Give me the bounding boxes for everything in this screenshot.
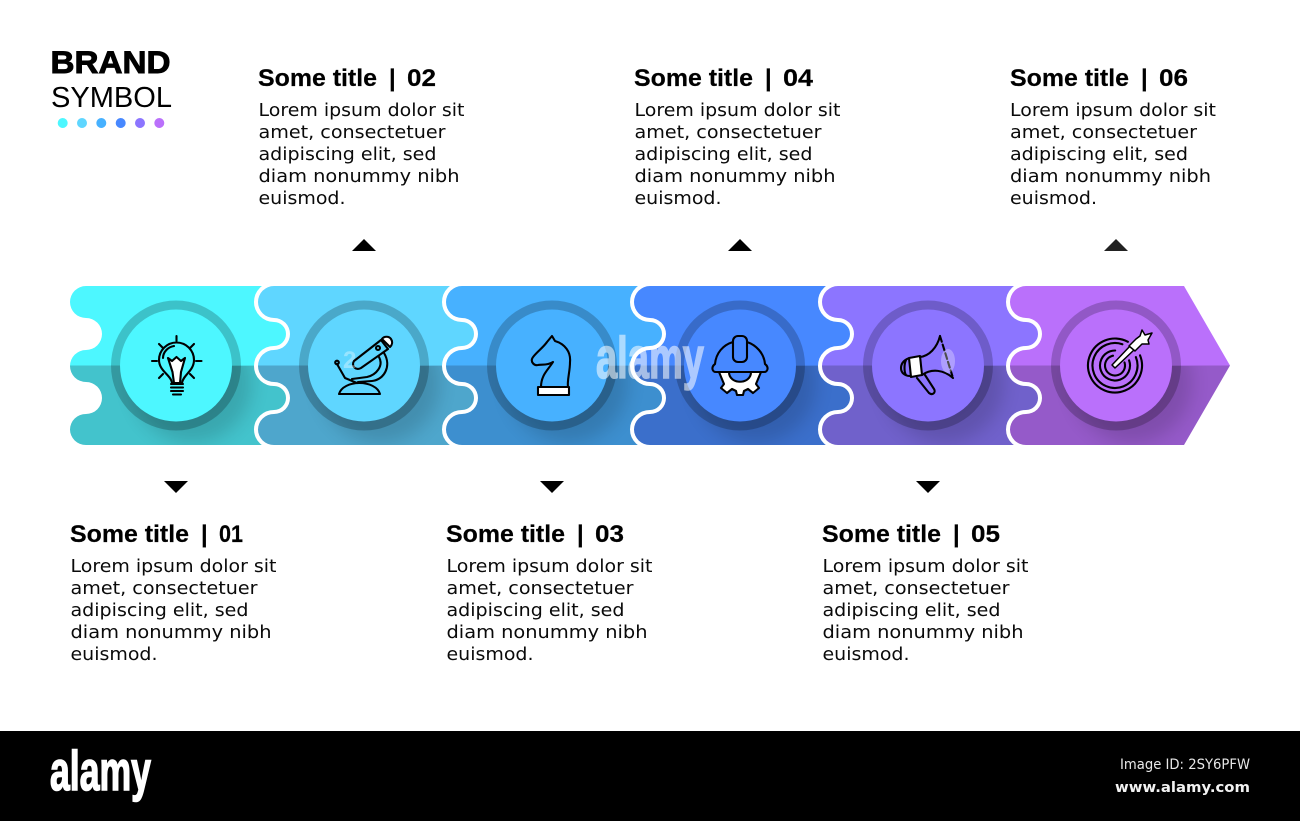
text block 03: diam nonummy nibh bbox=[446, 622, 648, 643]
text block 03: Some title bbox=[446, 521, 565, 548]
text block 04: Lorem ipsum dolor sit bbox=[634, 100, 840, 121]
text block 04: | bbox=[765, 65, 772, 92]
text block 01: diam nonummy nibh bbox=[70, 622, 272, 643]
text block 06: Some title bbox=[1010, 65, 1129, 92]
text block 03: 03 bbox=[595, 521, 624, 548]
text block 05: euismod. bbox=[822, 644, 910, 665]
text block 06 bbox=[1010, 65, 1216, 209]
icon: microscope bbox=[335, 337, 392, 394]
text block 04 bbox=[634, 65, 840, 209]
text block 05: amet, consectetuer bbox=[822, 578, 1010, 599]
text block 02: euismod. bbox=[258, 188, 346, 209]
segment 4 bbox=[634, 286, 859, 445]
text block 06: diam nonummy nibh bbox=[1010, 166, 1211, 187]
segment 6 arrow head bbox=[1010, 286, 1230, 445]
text block 05: Some title bbox=[822, 521, 941, 548]
icon: helmet with gear bbox=[712, 336, 768, 395]
text block 01: Lorem ipsum dolor sit bbox=[70, 556, 276, 577]
text block 03: euismod. bbox=[446, 644, 534, 665]
text block 02: amet, consectetuer bbox=[258, 122, 446, 143]
text block 03: amet, consectetuer bbox=[446, 578, 634, 599]
text block 06: Lorem ipsum dolor sit bbox=[1010, 100, 1216, 121]
text block 01: 01 bbox=[219, 521, 243, 548]
text block 01 bbox=[70, 521, 276, 665]
text block 06: adipiscing elit, sed bbox=[1010, 144, 1188, 165]
text block 06: amet, consectetuer bbox=[1010, 122, 1198, 143]
text block 01: Some title bbox=[70, 521, 189, 548]
brand logo: SYMBOL bbox=[51, 82, 172, 114]
arrow down 03 bbox=[540, 481, 564, 493]
puzzle arrow band bbox=[70, 286, 1230, 445]
text block 05: Lorem ipsum dolor sit bbox=[822, 556, 1028, 577]
text block 06: | bbox=[1141, 65, 1148, 92]
text block 01: euismod. bbox=[70, 644, 158, 665]
segment 5 bbox=[822, 286, 1047, 445]
footer logo: alamy bbox=[50, 739, 151, 802]
arrow down 05 bbox=[916, 481, 940, 493]
footer bar bbox=[0, 731, 1300, 821]
text block 03: adipiscing elit, sed bbox=[446, 600, 624, 621]
text block 03 bbox=[446, 521, 652, 665]
text block 01: | bbox=[201, 521, 208, 548]
icon: light bulb bbox=[152, 336, 202, 394]
text block 04: 04 bbox=[783, 65, 814, 92]
text block 01: adipiscing elit, sed bbox=[70, 600, 248, 621]
text block 02: 02 bbox=[407, 65, 436, 92]
arrow up 02 bbox=[352, 239, 376, 251]
text block 03: Lorem ipsum dolor sit bbox=[446, 556, 652, 577]
text block 02 bbox=[258, 65, 464, 209]
text block 05: diam nonummy nibh bbox=[822, 622, 1024, 643]
text block 05: | bbox=[953, 521, 960, 548]
text block 02: Lorem ipsum dolor sit bbox=[258, 100, 464, 121]
watermark: alamy bbox=[596, 326, 704, 391]
arrow up 06 bbox=[1104, 239, 1128, 251]
brand logo bbox=[50, 44, 172, 128]
text block 04: amet, consectetuer bbox=[634, 122, 822, 143]
image id: Image ID: 2SY6PFW bbox=[1120, 757, 1250, 773]
text block 02: adipiscing elit, sed bbox=[258, 144, 436, 165]
segment 1 bbox=[70, 286, 295, 445]
text block 02: Some title bbox=[258, 65, 377, 92]
text block 02: | bbox=[389, 65, 396, 92]
arrow up 04 bbox=[728, 239, 752, 251]
text block 04: diam nonummy nibh bbox=[634, 166, 836, 187]
watermark smudge on megaphone bbox=[941, 349, 955, 373]
text block 06: 06 bbox=[1159, 65, 1188, 92]
text block 05: adipiscing elit, sed bbox=[822, 600, 1000, 621]
brand logo: BRAND bbox=[50, 44, 170, 80]
text block 06: euismod. bbox=[1010, 188, 1097, 209]
text block 01: amet, consectetuer bbox=[70, 578, 258, 599]
text block 05: 05 bbox=[971, 521, 1000, 548]
website: www.alamy.com bbox=[1115, 780, 1250, 796]
icon: megaphone bbox=[901, 336, 953, 394]
text block 05 bbox=[822, 521, 1028, 665]
text block 04: euismod. bbox=[634, 188, 722, 209]
icon: target with arrow bbox=[1080, 330, 1152, 401]
text block 04: Some title bbox=[634, 65, 753, 92]
arrow down 01 bbox=[164, 481, 188, 493]
text block 03: | bbox=[577, 521, 584, 548]
watermark smudge on microscope: 2 bbox=[343, 347, 356, 374]
icon: chess knight bbox=[532, 336, 570, 395]
text block 02: diam nonummy nibh bbox=[258, 166, 460, 187]
segment 2 bbox=[258, 286, 483, 445]
text block 04: adipiscing elit, sed bbox=[634, 144, 812, 165]
segment 3 bbox=[446, 286, 671, 445]
